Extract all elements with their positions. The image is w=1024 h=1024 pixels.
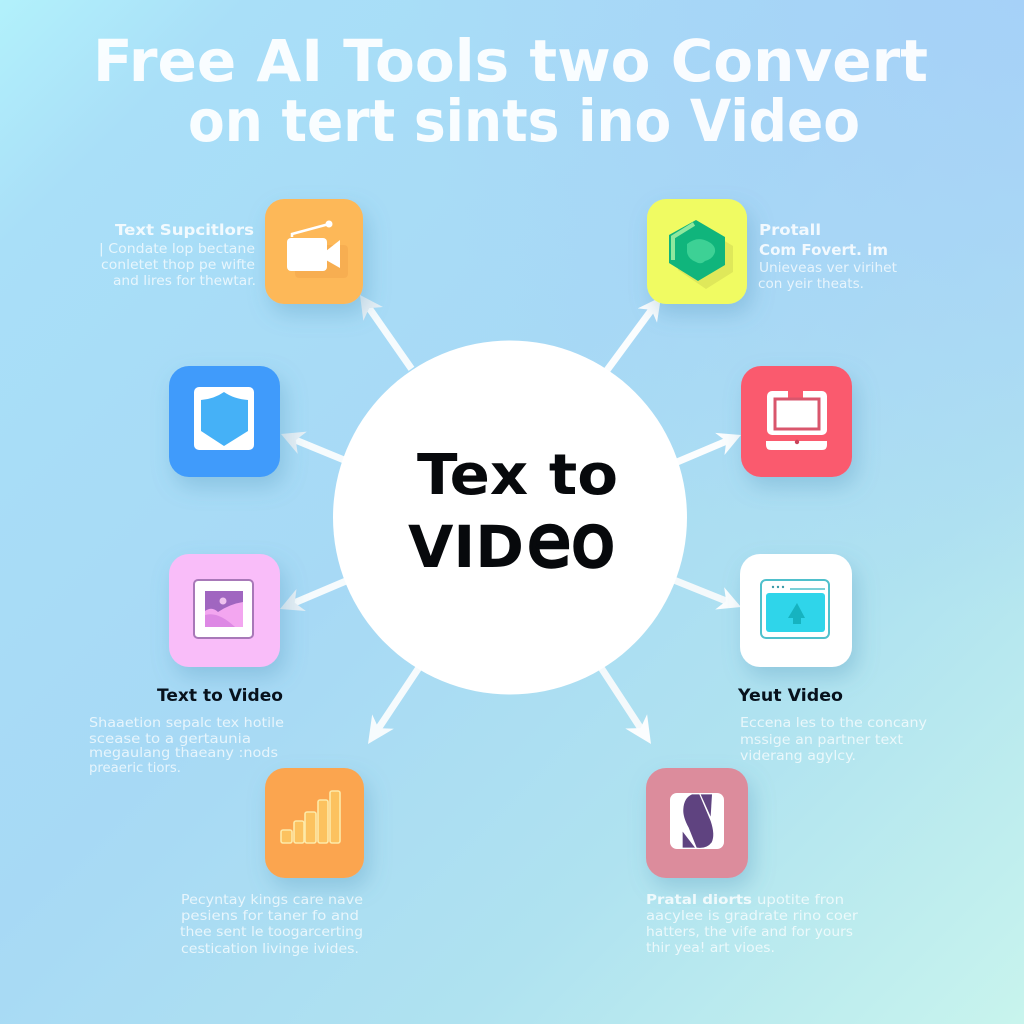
title: [93, 27, 928, 155]
icon: rising bars: [281, 791, 340, 843]
tool: browser (white): [740, 554, 852, 667]
text: top-right tool: Protall: [759, 221, 821, 239]
tool: S logo (rose): [646, 768, 748, 878]
text: lower-left tool: megaulang thaeany :nods: [89, 746, 278, 761]
text: top-right tool: con yeir theats.: [758, 277, 864, 292]
text: bottom-right tool: [646, 893, 859, 956]
text: lower-left tool: preaeric tiors.: [89, 761, 181, 776]
text: lower-left tool: [89, 686, 284, 776]
title: Free AI Tools two Convert: [93, 27, 928, 95]
icon: S logo: [670, 793, 724, 849]
tool: shield (blue): [169, 366, 280, 477]
text: top-right tool: Com Fovert. im: [759, 241, 888, 259]
text: top-left tool: Text Supcitlors: [115, 221, 254, 239]
text: lower-left tool: Text to Video: [157, 686, 283, 706]
icon: video camera: [287, 220, 348, 278]
center hub circle: [333, 340, 687, 694]
icon: browser upload: [761, 580, 829, 638]
hub label: VID: [408, 513, 524, 581]
text: bottom-left tool: [180, 893, 363, 957]
text: lower-left tool: Shaaetion sepalc tex hotile: [89, 716, 284, 731]
text: bottom-right tool: hatters, the vife and for yours: [646, 925, 853, 940]
text: bottom-right tool: thir yea! art vioes.: [646, 941, 775, 956]
text: lower-right tool: Yeut Video: [737, 686, 843, 706]
icon: laptop: [766, 390, 827, 450]
text: lower-right tool: viderang agylcy.: [740, 749, 856, 764]
hub label: Tex to: [417, 443, 618, 508]
text: top-left tool: | Condate lop bectane: [99, 242, 255, 257]
arrow: to top-right tool: [597, 290, 671, 377]
arrow: to upper-left tool: [276, 423, 350, 472]
tool: bar chart (orange): [265, 768, 364, 878]
text: top-left tool: conletet thop pe wifte: [101, 258, 255, 273]
tool: image (pink): [169, 554, 280, 667]
icon: green hexagon: [669, 220, 733, 289]
arrow: to bottom-left tool: [357, 660, 430, 751]
text: top-left tool: and lires for thewtar.: [113, 274, 256, 289]
tool: hexagon (yellow): [647, 199, 747, 304]
icon: picture frame: [194, 580, 253, 638]
hub label: [408, 443, 618, 583]
tool: video camera (orange): [265, 199, 363, 304]
arrow: to lower-left tool: [275, 570, 351, 620]
hub label: eo: [527, 499, 615, 583]
text: bottom-left tool: Pecyntay kings care nave: [181, 893, 363, 908]
text: top-right tool: [758, 221, 897, 292]
text: lower-left tool: scease to a gertaunia: [89, 732, 251, 747]
text: top-left tool: [99, 221, 256, 289]
text: bottom-right tool: upotite fron: [757, 893, 844, 908]
icon: shield: [194, 387, 254, 450]
text: lower-right tool: mssige an partner text: [740, 733, 903, 748]
text: bottom-right tool: aacylee is gradrate rino coer: [646, 909, 859, 924]
text: bottom-right tool: Pratal diorts: [646, 893, 752, 908]
text: lower-right tool: Eccena les to the concany: [740, 716, 927, 731]
arrow: to top-left tool: [350, 288, 421, 376]
text: lower-right tool: [737, 686, 927, 764]
arrow: to bottom-right tool: [590, 660, 662, 751]
text: bottom-left tool: cestication livinge ivides.: [181, 942, 359, 957]
text: bottom-left tool: pesiens for taner fo and: [181, 909, 359, 924]
text: top-right tool: Unieveas ver virihet: [759, 261, 897, 276]
arrow: to lower-right tool: [670, 569, 745, 618]
arrow: to upper-right tool: [672, 424, 746, 473]
text: bottom-left tool: thee sent le toogarcerting: [180, 925, 363, 940]
title: on tert sints ino Video: [188, 87, 860, 155]
tool: laptop (red): [741, 366, 852, 477]
